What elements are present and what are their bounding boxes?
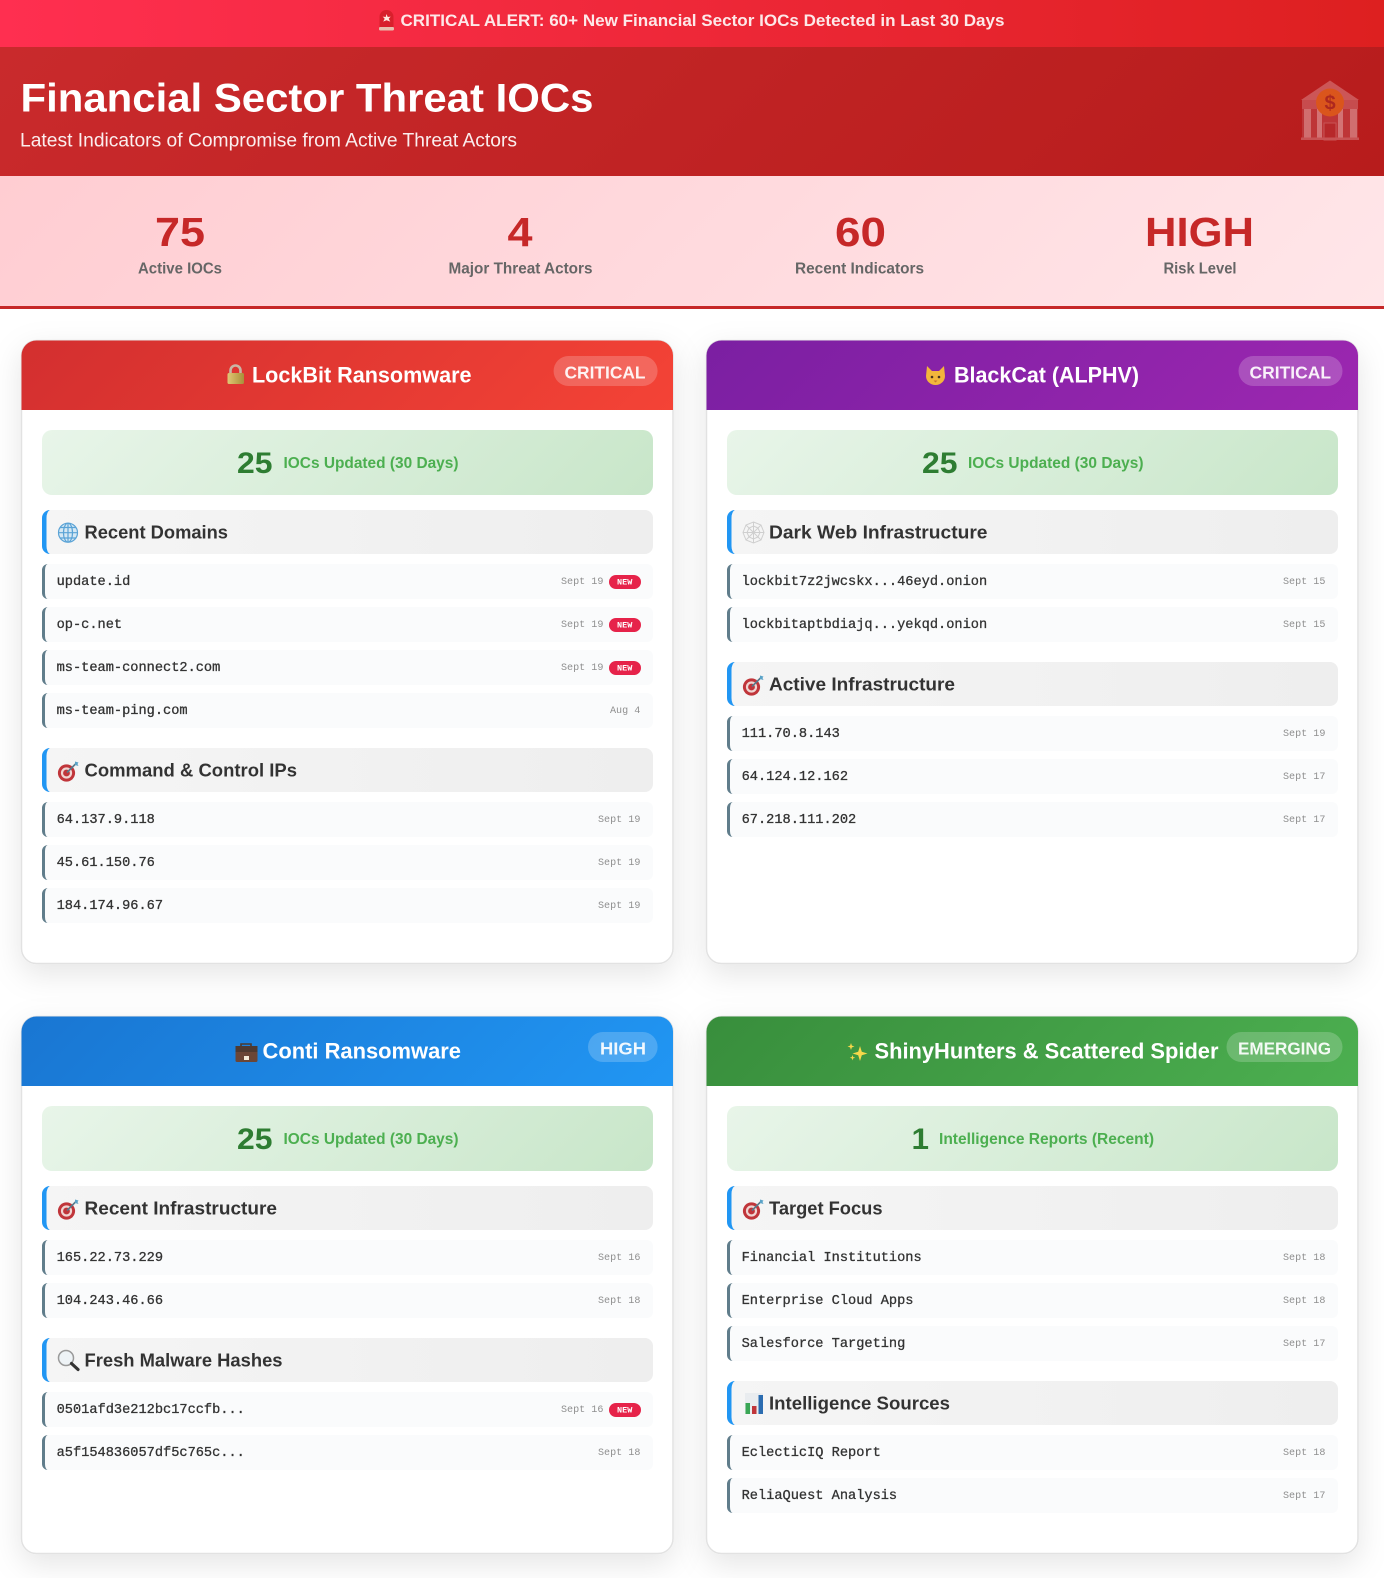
IOC row: 0501afd3e212bc17ccfb	[42, 1392, 653, 1427]
IOC count box: 25	[237, 447, 272, 480]
section heading: Active Infrastructure: Active Infrastructure	[769, 674, 955, 694]
severity badge: EMERGING	[1238, 1038, 1331, 1058]
icon: globe	[58, 523, 78, 542]
card header: ShinyHunters: ShinyHunters & Scattered Spider	[874, 1039, 1219, 1064]
card header: BlackCat	[706, 340, 1358, 410]
stat: active IOCs: Active IOCs	[138, 260, 222, 277]
row: EclecticIQ Report: Sept 18	[1283, 1448, 1325, 1459]
IOC row: lockbit7z2jwcskx	[727, 564, 1338, 599]
row: Salesforce Targeting: Salesforce Targeting	[742, 1337, 905, 1352]
IOC row: lockbitaptbdiajq	[727, 607, 1338, 642]
severity badge	[1226, 1032, 1342, 1062]
IOC row: op-c.net	[42, 607, 653, 642]
IOC row: 111.70.8.143: Sept 19	[1283, 729, 1325, 740]
IOC count box: IOCs Updated (30 Days)	[284, 455, 458, 472]
section heading: Dark Web Infrastructure	[727, 510, 1338, 554]
stat: active IOCs: 75	[155, 209, 205, 255]
alert text: CRITICAL ALERT: 60+ New Financial Sector IOCs Detected in Last 30 Days	[400, 11, 1004, 30]
row: Salesforce Targeting: Sept 17	[1283, 1339, 1325, 1350]
intelligence count box: 1	[912, 1123, 929, 1156]
stat: active IOCs	[138, 209, 222, 277]
IOC row: 67.218.111.202: Sept 17	[1283, 815, 1325, 826]
IOC row: 0501afd3e212bc17ccfb: 0501afd3e212bc17ccfb...	[57, 1403, 245, 1418]
IOC row: 64.124.12.162: Sept 17	[1283, 772, 1325, 783]
IOC count box	[727, 430, 1338, 495]
IOC row: 67.218.111.202	[727, 802, 1338, 837]
section heading: Recent Infrastructure	[42, 1186, 653, 1230]
intelligence count box	[727, 1106, 1338, 1171]
section heading: Intelligence Sources	[727, 1381, 1338, 1425]
IOC row: update.id: NEW	[617, 578, 633, 588]
panel: Conti Ransomware	[22, 1016, 673, 1554]
IOC row: a5f154836057df5c765c: Sept 18	[598, 1448, 640, 1459]
card header: LockBit: LockBit Ransomware	[252, 363, 472, 388]
panel: ShinyHunters & Scattered Spider	[706, 1016, 1358, 1554]
section heading: Fresh Malware Hashes: Fresh Malware Hashes	[84, 1350, 283, 1370]
IOC row: ms-team-connect2.com: NEW	[617, 664, 633, 674]
severity badge: CRITICAL	[1250, 362, 1331, 382]
IOC row: ms-team-connect2.com	[42, 650, 653, 685]
stat: risk level	[1145, 209, 1254, 277]
IOC row: 104.243.46.66: 104.243.46.66	[57, 1294, 163, 1309]
IOC row: ms-team-connect2.com: ms-team-connect2.com	[57, 661, 220, 676]
IOC row: 111.70.8.143	[727, 716, 1338, 751]
IOC row: 0501afd3e212bc17ccfb: NEW	[617, 1406, 633, 1416]
IOC row: 184.174.96.67: 184.174.96.67	[57, 899, 163, 914]
section heading: Recent Domains: Recent Domains	[84, 522, 228, 542]
stat: risk level: HIGH	[1145, 209, 1254, 255]
stats band	[0, 176, 1384, 309]
IOC count box: IOCs Updated (30 Days)	[284, 1131, 458, 1148]
icon: briefcase	[236, 1044, 258, 1062]
icon: bar chart	[745, 1393, 763, 1414]
row: Enterprise Cloud Apps	[727, 1283, 1338, 1318]
icon: bank with dollar coin: $	[1324, 92, 1336, 114]
card header: ShinyHunters	[706, 1016, 1358, 1086]
row: Financial Institutions: Sept 18	[1283, 1253, 1325, 1264]
subtitle: Latest Indicators of Compromise from Active Threat Actors	[20, 130, 517, 152]
IOC row: ms-team-connect2.com: Sept 19	[561, 663, 603, 674]
IOC row: 45.61.150.76: 45.61.150.76	[57, 856, 155, 871]
intelligence count box: Intelligence Reports (Recent)	[939, 1131, 1154, 1148]
IOC row: lockbitaptbdiajq: lockbitaptbdiajq...yekqd.onion	[742, 618, 987, 633]
IOC row: 184.174.96.67	[42, 888, 653, 923]
IOC row: update.id: update.id	[57, 575, 130, 590]
IOC row: 64.137.9.118: Sept 19	[598, 815, 640, 826]
card header: Conti	[22, 1016, 673, 1086]
section heading: Target Focus	[727, 1186, 1338, 1230]
IOC row: update.id: Sept 19	[561, 577, 603, 588]
IOC row: 64.124.12.162	[727, 759, 1338, 794]
IOC row: ms-team-ping.com: ms-team-ping.com	[57, 704, 188, 719]
IOC row: op-c.net: op-c.net	[57, 618, 122, 633]
IOC row: lockbit7z2jwcskx: lockbit7z2jwcskx...46eyd.onion	[742, 575, 987, 590]
critical alert banner	[0, 0, 1384, 47]
severity badge	[588, 1032, 658, 1062]
IOC row: 0501afd3e212bc17ccfb: Sept 16	[561, 1405, 603, 1416]
row: ReliaQuest Analysis: ReliaQuest Analysis	[742, 1489, 897, 1504]
icon: cat face	[926, 366, 945, 385]
section heading: Active Infrastructure	[727, 662, 1338, 706]
card header: BlackCat: BlackCat (ALPHV)	[954, 363, 1139, 388]
severity badge: CRITICAL	[564, 362, 646, 382]
row: Enterprise Cloud Apps: Sept 18	[1283, 1296, 1325, 1307]
icon: target dart	[743, 676, 764, 696]
row: ReliaQuest Analysis	[727, 1478, 1338, 1513]
IOC row: lockbitaptbdiajq: Sept 15	[1283, 620, 1325, 631]
card header: LockBit	[22, 340, 673, 410]
row: Enterprise Cloud Apps: Enterprise Cloud Apps	[742, 1294, 914, 1309]
row: EclecticIQ Report	[727, 1435, 1338, 1470]
IOC row: 64.137.9.118	[42, 802, 653, 837]
IOC count box: IOCs Updated (30 Days)	[968, 455, 1144, 472]
section heading: Fresh Malware Hashes	[42, 1338, 653, 1382]
stat: recent indicators	[795, 209, 924, 277]
severity badge	[554, 356, 658, 386]
row: Financial Institutions	[727, 1240, 1338, 1275]
IOC row: 64.124.12.162: 64.124.12.162	[742, 770, 848, 785]
row: ReliaQuest Analysis: Sept 17	[1283, 1491, 1325, 1502]
section heading: Dark Web Infrastructure: Dark Web Infrastructure	[769, 522, 988, 542]
row: EclecticIQ Report: EclecticIQ Report	[742, 1446, 881, 1461]
icon: target dart	[58, 1200, 78, 1220]
stat: recent indicators: 60	[835, 209, 886, 255]
IOC count box: 25	[237, 1123, 272, 1156]
icon: target dart	[58, 762, 78, 782]
panel: BlackCat (ALPHV)	[706, 340, 1358, 964]
IOC row: 111.70.8.143: 111.70.8.143	[742, 727, 840, 742]
IOC row: 45.61.150.76	[42, 845, 653, 880]
icon: magnifier	[58, 1350, 78, 1370]
IOC row: 165.22.73.229	[42, 1240, 653, 1275]
row: Financial Institutions: Financial Institutions	[742, 1251, 922, 1266]
icon: sparkles	[848, 1043, 868, 1061]
icon: lock	[228, 366, 244, 384]
IOC row: 165.22.73.229: 165.22.73.229	[57, 1251, 163, 1266]
icon: siren	[379, 10, 394, 30]
IOC count box: 25	[922, 447, 958, 480]
IOC row: 165.22.73.229: Sept 16	[598, 1253, 640, 1264]
IOC row: op-c.net: NEW	[617, 620, 633, 630]
icon: spider web	[743, 522, 764, 543]
IOC row: 64.137.9.118: 64.137.9.118	[57, 813, 155, 828]
IOC row: ms-team-ping.com	[42, 693, 653, 728]
severity badge	[1238, 356, 1342, 386]
stat: threat actors: 4	[508, 209, 533, 255]
panel: LockBit Ransomware	[22, 340, 673, 964]
section heading: Recent Infrastructure: Recent Infrastructure	[84, 1198, 277, 1218]
stat: risk level: Risk Level	[1164, 260, 1236, 277]
header band	[0, 47, 1384, 176]
section heading: Target Focus: Target Focus	[769, 1198, 882, 1218]
card header: Conti: Conti Ransomware	[262, 1039, 461, 1064]
section heading: Recent Domains	[42, 510, 653, 554]
IOC row: lockbit7z2jwcskx: Sept 15	[1283, 577, 1325, 588]
IOC row: 45.61.150.76: Sept 19	[598, 858, 640, 869]
title: Financial Sector Threat IOCs	[20, 77, 594, 121]
IOC count box	[42, 430, 653, 495]
IOC row: a5f154836057df5c765c	[42, 1435, 653, 1470]
IOC count box	[42, 1106, 653, 1171]
section heading: Command & Control IPs: Command & Control IPs	[84, 760, 297, 780]
stat: threat actors	[448, 209, 592, 277]
IOC row: update.id	[42, 564, 653, 599]
icon: bank with dollar coin	[1301, 80, 1359, 140]
row: Salesforce Targeting	[727, 1326, 1338, 1361]
IOC row: 104.243.46.66: Sept 18	[598, 1296, 640, 1307]
section heading: Intelligence Sources: Intelligence Sources	[769, 1393, 950, 1413]
IOC row: 184.174.96.67: Sept 19	[598, 901, 640, 912]
IOC row: 67.218.111.202: 67.218.111.202	[742, 813, 856, 828]
IOC row: 104.243.46.66	[42, 1283, 653, 1318]
IOC row: op-c.net: Sept 19	[561, 620, 603, 631]
stat: threat actors: Major Threat Actors	[448, 260, 592, 277]
IOC row: ms-team-ping.com: Aug 4	[610, 706, 640, 717]
stat: recent indicators: Recent Indicators	[795, 260, 924, 277]
IOC row: a5f154836057df5c765c: a5f154836057df5c765c...	[57, 1446, 245, 1461]
icon: target dart	[743, 1200, 764, 1220]
section heading: Command & Control IPs	[42, 748, 653, 792]
severity badge: HIGH	[600, 1038, 646, 1058]
